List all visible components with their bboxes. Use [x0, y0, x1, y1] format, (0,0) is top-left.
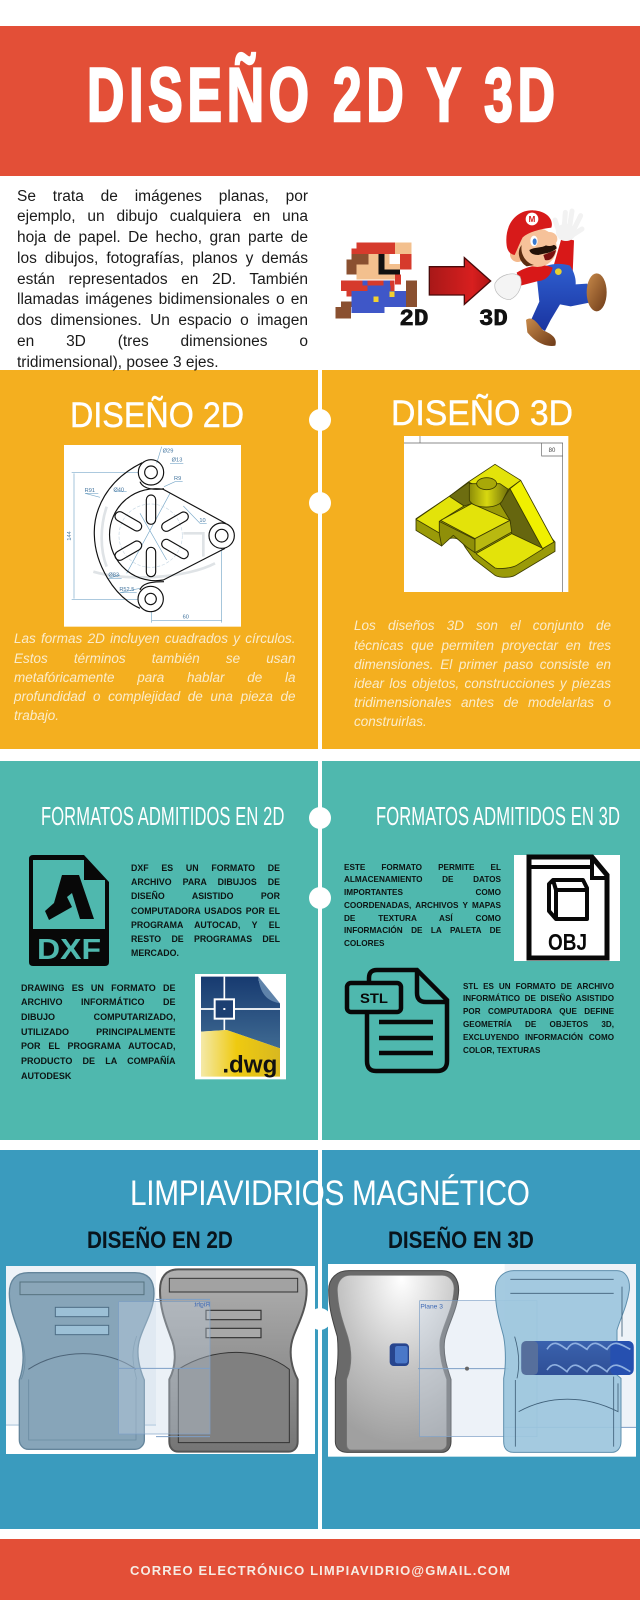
reference plane [119, 1299, 210, 1437]
text: DXF: COMPUTADORA USADOS POR EL [131, 906, 280, 916]
technical drawing 2D: R52.5 [119, 587, 134, 593]
blue translucent view [9, 1273, 154, 1449]
icon: OBJ file [514, 854, 620, 961]
panel: limpiavidrios 2D [0, 1150, 318, 1529]
text: DWG: PRODUCTO DE LA COMPAÑÍA [21, 1056, 176, 1066]
text: DWG: DIBUJO COMPUTARIZADO, [21, 1012, 176, 1022]
reference plane [418, 1301, 636, 1437]
heading: diseño 3D: DISEÑO 3D [391, 393, 573, 433]
icon: DXF file: DXF [37, 934, 101, 966]
CAD views 3D [328, 1264, 636, 1457]
description 2D: Estos términos también se usan [14, 651, 296, 666]
intro paragraph: tridimensional), posee 3 ejes. [17, 354, 219, 370]
text: STL: GEOMETRÍA DE OBJETOS 3D, [463, 1020, 614, 1029]
description 3D: idear los objetos, construcciones y piezas [354, 676, 611, 691]
CAD views 2D [6, 1266, 315, 1454]
icon: 3D Mario [495, 210, 607, 346]
text: OBJ: COORDENADAS, ARCHIVOS Y MAPAS [344, 901, 501, 910]
text: DWG: DRAWING ES UN FORMATO DE [21, 983, 176, 993]
description 3D: dimensiones. El primer paso consiste en [354, 657, 611, 672]
text: STL [463, 982, 614, 1055]
icon: DWG file [195, 974, 286, 1080]
text: OBJ [344, 863, 501, 948]
intro paragraph: en 3D (tres dimensiones o [17, 333, 308, 350]
text: DXF: DISEÑO ASISTIDO POR [131, 891, 280, 901]
description 2D: profundidad o complejidad de una pieza de [14, 689, 296, 704]
panel: formatos 2D [0, 761, 318, 1140]
translucent blue view with roller [495, 1271, 634, 1452]
text: OBJ: INFORMACIÓN DE LA PALETA DE [344, 926, 501, 935]
text: OBJ: COLORES [344, 939, 384, 948]
gray solid view [329, 1271, 459, 1452]
text: STL: INFORMÁTICO DE DISEÑO ASISTIDO [463, 994, 614, 1003]
title: DISEÑO 2D Y 3D [87, 52, 560, 137]
text: DWG: UTILIZADO PRINCIPALMENTE [21, 1027, 176, 1037]
panel: diseño 3D [322, 370, 640, 749]
label: 3D: 3D [479, 306, 508, 332]
intro paragraph: ejemplo, un dibujo cualquiera en una [17, 208, 308, 225]
header banner [0, 26, 640, 176]
description 3D: Los diseños 3D son el conjunto de [354, 618, 611, 633]
decorative node: blue [309, 1308, 331, 1330]
text: DXF: DXF ES UN FORMATO DE [131, 863, 280, 873]
technical drawing 2D [64, 445, 241, 627]
description 2D: trabajo. [14, 708, 59, 723]
text: DWG: AUTODESK [21, 1071, 71, 1081]
heading: diseño en 3D: DISEÑO EN 3D [388, 1227, 534, 1253]
label: 2D: 2D [399, 306, 428, 332]
icon: OBJ file: OBJ [548, 929, 587, 955]
heading: limpiavidrios magnético: LIMPIAVIDRIOS MAGNÉTICO [130, 1174, 530, 1213]
text: STL: STL ES UN FORMATO DE ARCHIVO [463, 982, 614, 991]
heading: diseño 2D: DISEÑO 2D [70, 396, 244, 435]
description 3D [354, 618, 611, 729]
icon: STL file [344, 968, 450, 1074]
reference plane: Right [194, 1302, 210, 1309]
technical drawing 2D: R9 [174, 476, 181, 482]
description 3D: técnicas que permiten proyectar en tres [354, 638, 611, 653]
icon: STL file: STL [360, 990, 388, 1006]
decorative node: teal top [309, 807, 331, 829]
technical drawing 2D: Ø83 [108, 572, 119, 578]
heading: formatos 3D: FORMATOS ADMITIDOS EN 3D [376, 801, 620, 831]
description 3D: construirlas. [354, 714, 427, 729]
intro paragraph: los dibujos, fotografías, planos y demás [17, 250, 308, 267]
heading: formatos 2D: FORMATOS ADMITIDOS EN 2D [41, 801, 284, 831]
technical drawing 2D: 10 [199, 518, 206, 524]
icon: pixel Mario sprite [336, 243, 417, 318]
technical drawing 2D: Ø13 [172, 458, 182, 464]
technical drawing 2D: R91 [85, 488, 95, 494]
panel: diseño 2D [0, 370, 318, 749]
reference plane: Plane 3 [420, 1303, 443, 1310]
icon: DWG file: .dwg [222, 1052, 277, 1079]
text: DXF [131, 863, 280, 958]
description 2D: Las formas 2D incluyen cuadrados y círculos. [14, 631, 296, 646]
text: STL: POR COMPUTADORA QUE DEFINE [463, 1007, 614, 1016]
decorative node: yellow top [309, 409, 331, 431]
description 3D: tridimensionales antes de modelarlas o [354, 695, 611, 710]
text: DWG: POR EL PROGRAMA AUTOCAD, [21, 1041, 176, 1051]
contact line: CORREO ELECTRÓNICO LIMPIAVIDRIO@GMAIL.COM [130, 1563, 510, 1578]
text: STL: COLOR, TEXTURAS [463, 1046, 540, 1055]
technical drawing 2D: Ø40 [113, 488, 124, 494]
text: OBJ: ALMACENAMIENTO DE DATOS [344, 875, 501, 884]
intro paragraph: llamadas imágenes bidimensionales o en [17, 291, 308, 308]
heading: diseño en 2D: DISEÑO EN 2D [87, 1227, 233, 1253]
decorative node: yellow lower [309, 492, 331, 514]
intro paragraph: están representados en 2D. También [17, 270, 308, 288]
description 2D: metafóricamente para hablar de la [14, 670, 296, 685]
intro paragraph: hoja de papel. De hecho, gran parte de [17, 229, 308, 246]
arrow [429, 258, 491, 304]
description 2D [14, 631, 296, 723]
decorative node: teal lower [309, 887, 331, 909]
isometric 3D part [404, 436, 568, 592]
intro paragraph: dos dimensiones. Un espacio o imagen [17, 312, 308, 329]
text: OBJ: ESTE FORMATO PERMITE EL [344, 863, 501, 872]
panel: limpiavidrios 3D [322, 1150, 640, 1529]
text: DXF: RESTO DE PROGRAMAS DEL [131, 934, 280, 944]
icon: 3D Mario: M [529, 215, 536, 224]
technical drawing 2D: Ø29 [163, 449, 173, 455]
illustration: 2D Mario to 3D Mario [336, 208, 607, 346]
text: DXF: MERCADO. [131, 948, 179, 958]
text: OBJ: IMPORTANTES COMO [344, 888, 501, 897]
text: DWG [21, 983, 176, 1081]
text: OBJ: DE TEXTURA ASÍ COMO [344, 914, 501, 923]
intro paragraph: Se trata de imágenes planas, por [17, 188, 308, 204]
technical drawing 2D: 144 [67, 531, 73, 541]
text: DWG: ARCHIVO INFORMÁTICO DE [21, 997, 176, 1007]
text: DXF: ARCHIVO PARA DIBUJOS DE [131, 877, 280, 887]
intro paragraph [17, 188, 308, 370]
gray shaded view [160, 1269, 307, 1452]
technical drawing 2D: 60 [183, 614, 189, 620]
panel: formatos 3D [322, 761, 640, 1140]
text: STL: EXCLUYENDO INFORMACIÓN COMO [463, 1033, 614, 1042]
text: DXF: PROGRAMA AUTOCAD, Y EL [131, 920, 280, 930]
footer [0, 1539, 640, 1600]
icon: DXF file [29, 855, 109, 966]
isometric 3D part: 80 [549, 448, 556, 454]
